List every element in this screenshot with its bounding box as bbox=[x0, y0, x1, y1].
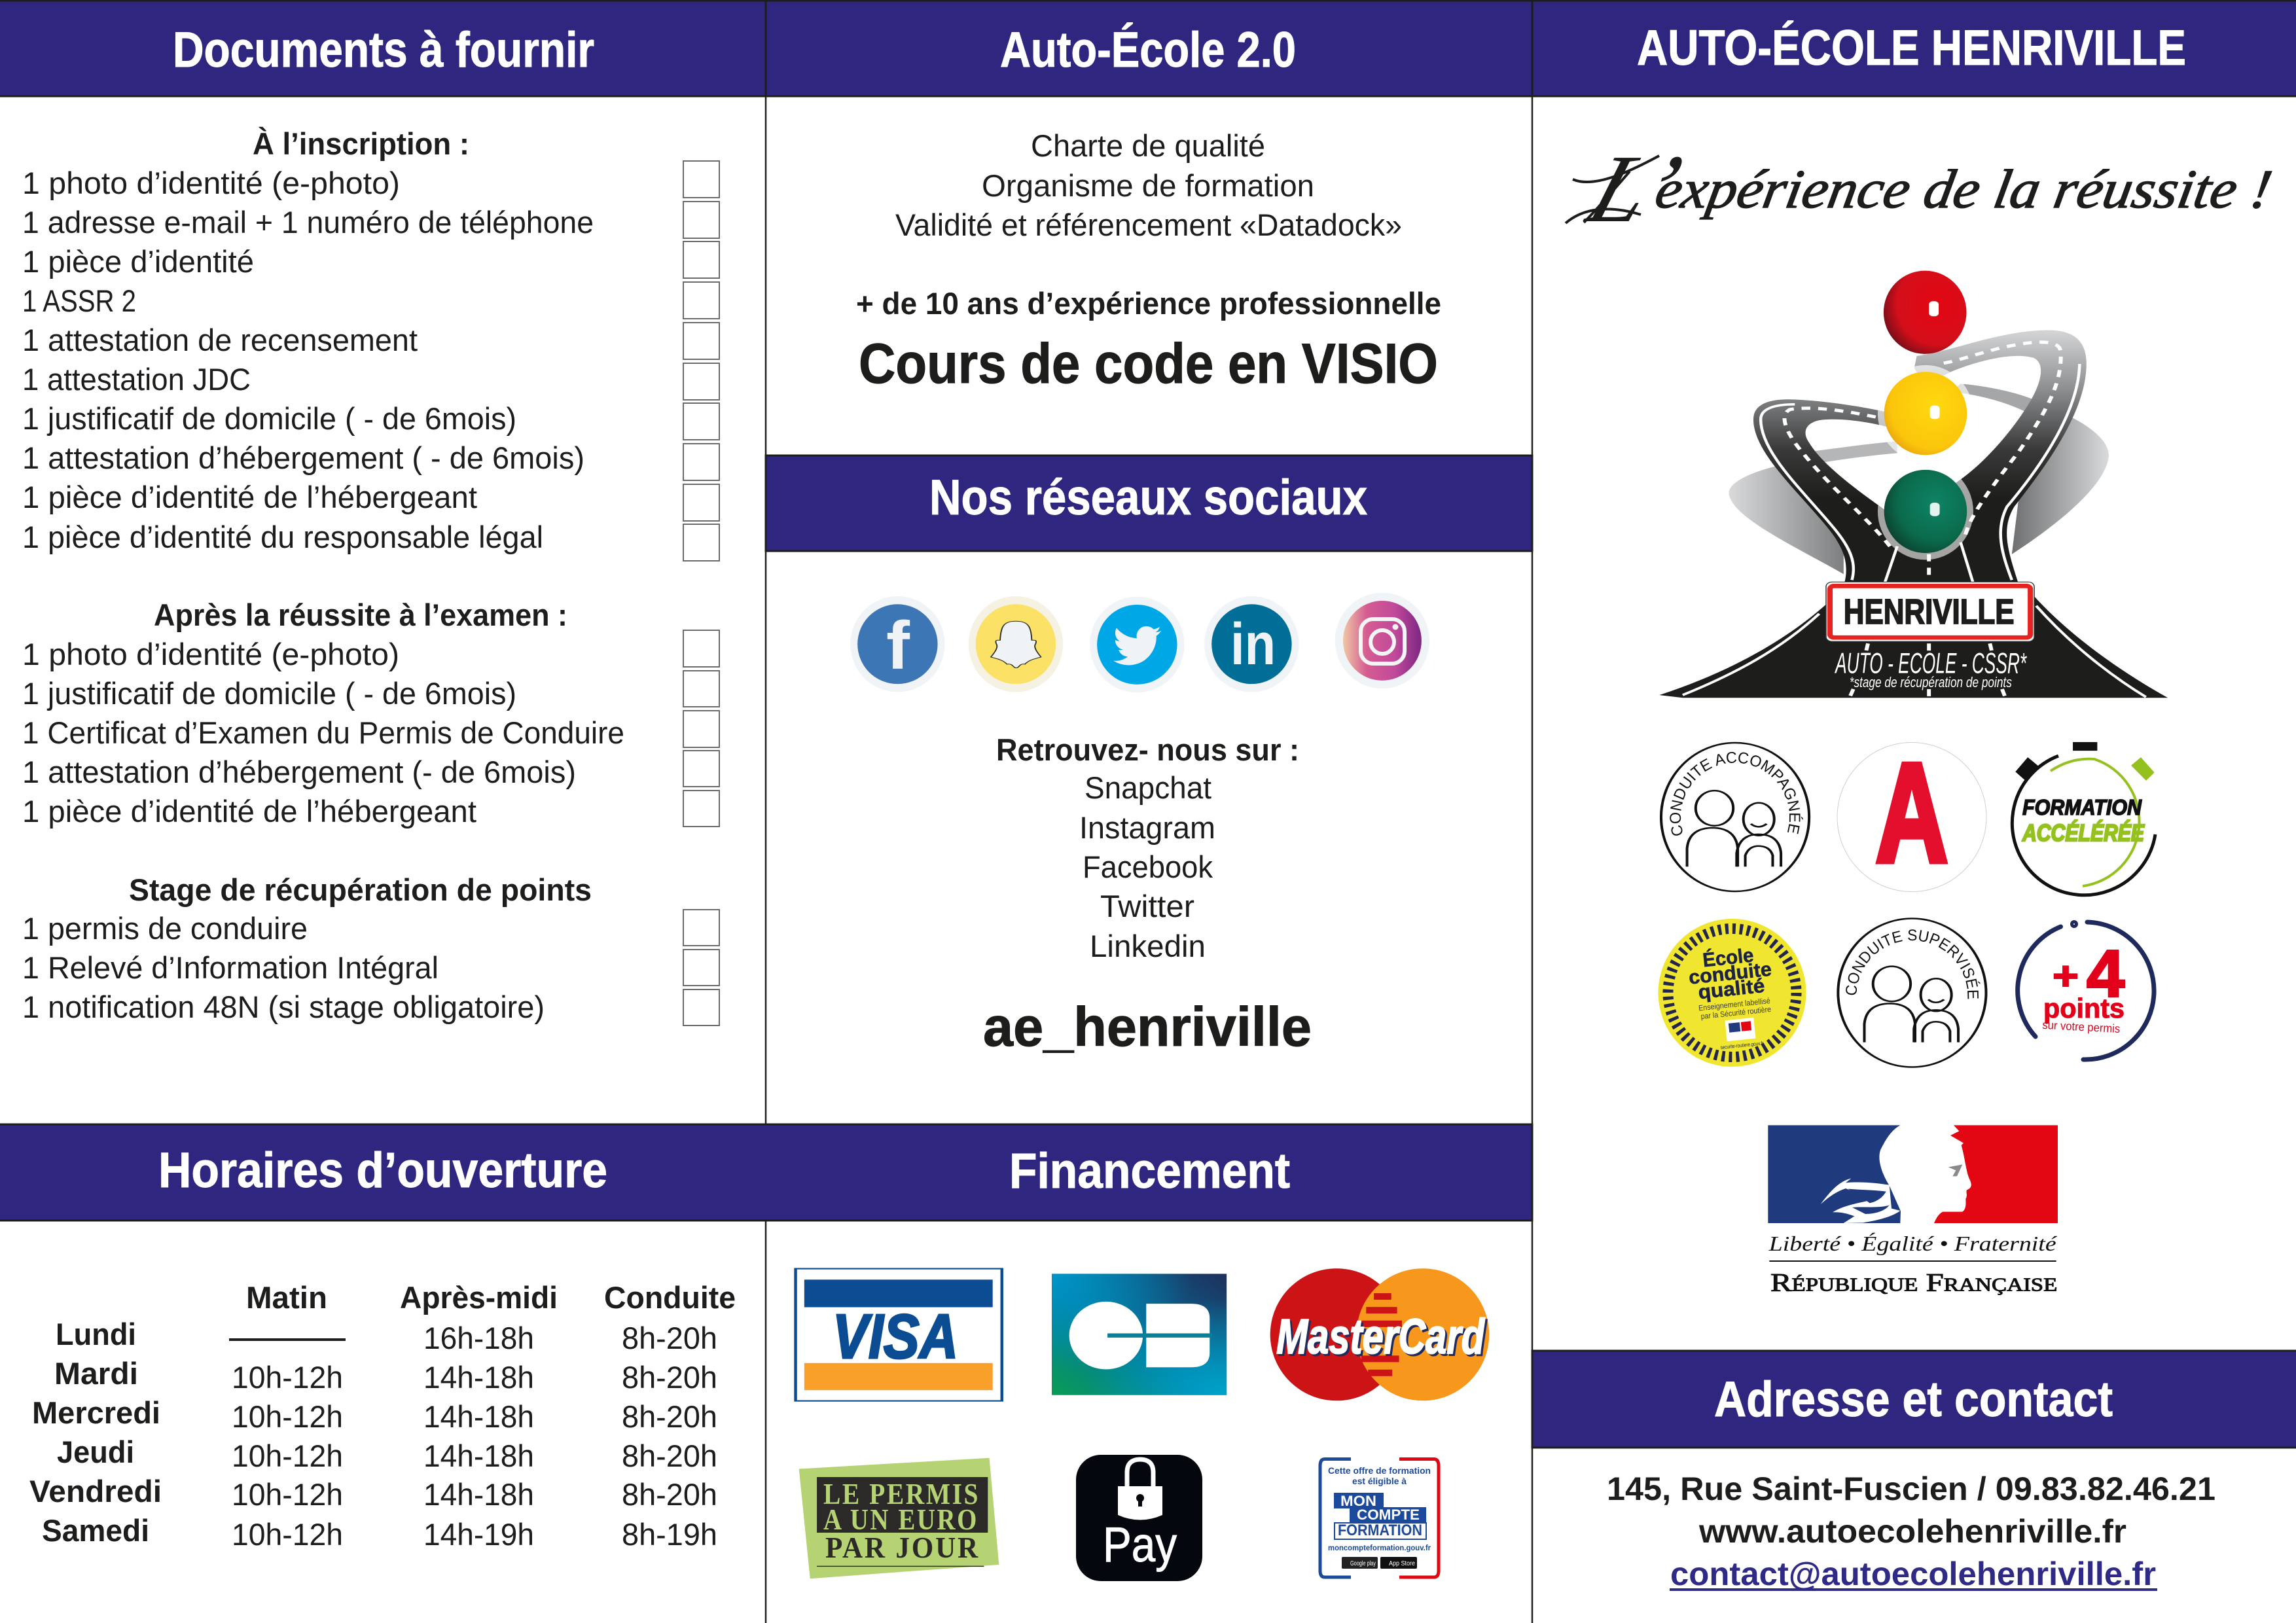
road shadows bbox=[1729, 383, 2109, 574]
table: horaires d'ouverture: 14h-19h bbox=[423, 1517, 534, 1552]
header: Horaires d'ouverture et Financement: Horaires d’ouverture bbox=[158, 1143, 607, 1198]
slogan: L’ bbox=[1576, 135, 1694, 242]
panel: adresse et contact: www.autoecolehenriville.fr bbox=[1698, 1513, 2126, 1550]
panel: documents à l'inscription: 1 photo d’identité (e-photo) bbox=[22, 166, 400, 200]
logo: paiement sécurisé Pay bbox=[1076, 1455, 1202, 1581]
panel: documents après l'examen: 1 justificatif de domicile ( - de 6mois) bbox=[22, 676, 516, 711]
badge: A jeune conducteur bbox=[1837, 734, 1986, 891]
panel: retrouvez-nous: Twitter bbox=[1100, 889, 1194, 923]
table: horaires d'ouverture: 8h-20h bbox=[622, 1360, 717, 1395]
table: horaires d'ouverture: Mardi bbox=[54, 1356, 138, 1391]
badge: A jeune conducteur: A bbox=[1876, 734, 1948, 891]
sign: Henriville: HENRIVILLE bbox=[1844, 592, 2015, 632]
badge: conduite accompagnée: CONDUITE ACCOMPAGNÉE bbox=[1670, 751, 1803, 836]
table: horaires d'ouverture: Conduite bbox=[604, 1280, 736, 1315]
icon: linkedin: in bbox=[1230, 612, 1276, 677]
grid lines bbox=[766, 0, 1532, 1623]
icon: twitter bbox=[1090, 597, 1185, 692]
panel: documents après l'examen: 1 photo d’identité (e-photo) bbox=[22, 637, 399, 671]
panel: documents à l'inscription: 1 ASSR 2 bbox=[22, 283, 136, 318]
icon: instagram bbox=[1335, 593, 1429, 688]
header: Horaires d'ouverture et Financement: Financement bbox=[1009, 1143, 1290, 1199]
panel: documents à l'inscription: 1 adresse e-mail + 1 numéro de téléphone bbox=[22, 205, 594, 240]
table: horaires d'ouverture: 16h-18h bbox=[423, 1321, 534, 1355]
table: horaires d'ouverture: 10h-12h bbox=[232, 1360, 343, 1395]
panel: documents à l'inscription: 1 attestation d’hébergement ( - de 6mois) bbox=[22, 440, 584, 475]
header: Horaires d'ouverture et Financement bbox=[0, 1124, 1532, 1221]
header: Auto-École Henriville: AUTO-ÉCOLE HENRIVILLE bbox=[1637, 20, 2186, 76]
panel: documents après l'examen: 1 Certificat d’Examen du Permis de Conduire bbox=[22, 715, 624, 750]
logo: Mon Compte Formation: Cette offre de formation bbox=[1328, 1465, 1431, 1476]
panel: documents à l'inscription: 1 pièce d’identité du responsable légal bbox=[22, 520, 543, 554]
logo: Visa: VISA bbox=[833, 1302, 958, 1372]
logo: Mon Compte Formation: Google play bbox=[1350, 1560, 1376, 1567]
panel: documents à l'inscription: 1 justificatif de domicile ( - de 6mois) bbox=[22, 401, 516, 436]
table: horaires d'ouverture: Matin bbox=[246, 1280, 327, 1315]
table: horaires d'ouverture: 10h-12h bbox=[232, 1477, 343, 1512]
panel: stage de récupération de points bbox=[22, 872, 719, 1026]
logo: paiement sécurisé Pay: Pay bbox=[1103, 1517, 1177, 1572]
badge: +4 points: sur votre permis bbox=[2042, 1018, 2121, 1035]
logo: le permis à un euro par jour: LE PERMIS bbox=[823, 1477, 980, 1510]
République Française: République Française bbox=[1770, 1268, 2057, 1297]
table: horaires d'ouverture: Lundi bbox=[56, 1317, 136, 1351]
icon: facebook: f bbox=[886, 608, 910, 684]
badge: école conduite qualité: conduite bbox=[1688, 959, 1772, 989]
badge: école conduite qualité: securite-routiere.gouv.fr bbox=[1720, 1040, 1764, 1050]
logo: Visa bbox=[796, 1269, 1002, 1401]
logo: Mon Compte Formation: est éligible à bbox=[1352, 1476, 1407, 1486]
panel: qualité auto-école bbox=[856, 128, 1441, 395]
panel: adresse et contact bbox=[1607, 1471, 2215, 1592]
panel: documents après l'examen bbox=[22, 597, 719, 829]
table: horaires d'ouverture: 14h-18h bbox=[423, 1360, 534, 1395]
logo: le permis à un euro par jour: PAR JOUR bbox=[825, 1531, 980, 1564]
table: horaires d'ouverture: Jeudi bbox=[57, 1435, 134, 1469]
badge: école conduite qualité: qualité bbox=[1697, 975, 1766, 1003]
panel: financement logos bbox=[796, 1268, 1489, 1581]
table: horaires d'ouverture: 8h-20h bbox=[622, 1438, 717, 1473]
badge: école conduite qualité: par la Sécurité routière bbox=[1700, 1005, 1772, 1021]
table: horaires d'ouverture: 8h-20h bbox=[622, 1321, 717, 1355]
logo: Henriville feu tricolore et routes: AUTO - ECOLE - CSSR* bbox=[1835, 647, 2027, 680]
logo: République Française bbox=[1768, 1125, 2058, 1297]
slogan bbox=[1566, 135, 2276, 242]
table: horaires d'ouverture: Mercredi bbox=[32, 1395, 160, 1430]
table: horaires d'ouverture: 10h-12h bbox=[232, 1517, 343, 1552]
text: auto-école CSSR bbox=[1835, 647, 2027, 690]
table: horaires d'ouverture: Samedi bbox=[42, 1513, 149, 1548]
panel: qualité auto-école: + de 10 ans d’expérience professionnelle bbox=[856, 286, 1441, 321]
text: auto-école CSSR: *stage de récupération de points bbox=[1850, 675, 2012, 690]
table: horaires d'ouverture: 10h-12h bbox=[232, 1399, 343, 1434]
panel: retrouvez-nous bbox=[983, 732, 1312, 1058]
table: horaires d'ouverture: 14h-18h bbox=[423, 1438, 534, 1473]
panel: documents à l'inscription: 1 pièce d’identité bbox=[22, 244, 254, 279]
badge: école conduite qualité bbox=[1659, 919, 1806, 1067]
panel: retrouvez-nous: Facebook bbox=[1083, 849, 1213, 884]
panel: retrouvez-nous: Snapchat bbox=[1085, 770, 1211, 805]
panel: documents à l'inscription: 1 attestation de recensement bbox=[22, 323, 418, 357]
panel: qualité auto-école: Cours de code en VISIO bbox=[859, 332, 1438, 395]
motto: Liberté • Égalité • Fraternité bbox=[1768, 1232, 2058, 1255]
logo: MasterCard: MasterCard bbox=[1276, 1309, 1486, 1364]
panel: stage de récupération de points: 1 notification 48N (si stage obligatoire) bbox=[22, 990, 545, 1024]
badge: +4 points: + bbox=[2053, 954, 2079, 998]
panel: documents après l'examen: 1 pièce d’identité de l’hébergeant bbox=[22, 794, 476, 829]
badge: +4 points bbox=[2018, 922, 2154, 1060]
badge: formation accélérée bbox=[2012, 742, 2155, 895]
table: horaires d'ouverture: 8h-20h bbox=[622, 1477, 717, 1512]
table: horaires d'ouverture: 14h-18h bbox=[423, 1399, 534, 1434]
table: horaires d'ouverture: Après-midi bbox=[400, 1280, 558, 1315]
table: horaires d'ouverture: 14h-18h bbox=[423, 1477, 534, 1512]
icon: linkedin bbox=[1204, 596, 1299, 692]
header: Auto-École Henriville bbox=[1532, 1, 2296, 96]
logo: MasterCard: MasterCard bbox=[1278, 1311, 1488, 1366]
header: Adresse et contact: Adresse et contact bbox=[1714, 1372, 2113, 1427]
panel: qualité auto-école: Organisme de formation bbox=[982, 168, 1314, 203]
traffic lights bbox=[1878, 271, 1973, 560]
panel: documents après l'examen: Après la réussite à l’examen : bbox=[154, 597, 567, 632]
panel: adresse et contact: contact@autoecolehenriville.fr bbox=[1670, 1556, 2156, 1592]
panel: documents à l'inscription: 1 pièce d’identité de l’hébergeant bbox=[22, 480, 477, 514]
table: horaires d'ouverture: 8h-19h bbox=[622, 1517, 717, 1552]
icon: snapchat bbox=[969, 596, 1063, 692]
badge: formation accélérée: ACCÉLÉRÉE bbox=[2022, 819, 2145, 846]
panel: adresse et contact: 145, Rue Saint-Fuscien / 09.83.82.46.21 bbox=[1607, 1471, 2215, 1507]
flag with Marianne bbox=[1768, 1125, 2058, 1223]
logo: Mon Compte Formation: moncompteformation.gouv.fr bbox=[1328, 1543, 1431, 1552]
panel: retrouvez-nous: Linkedin bbox=[1090, 929, 1206, 963]
logo: Mon Compte Formation: COMPTE bbox=[1357, 1507, 1420, 1523]
logo: Mon Compte Formation: FORMATION bbox=[1338, 1522, 1422, 1539]
logo: Mon Compte Formation: App Store bbox=[1389, 1560, 1415, 1567]
slogan: expérience de la réussite ! bbox=[1651, 160, 2276, 220]
header: Documents à fournir bbox=[0, 1, 766, 96]
header: Auto-École 2.0 bbox=[766, 1, 1532, 96]
logo: Mon Compte Formation bbox=[1320, 1459, 1439, 1577]
badge: +4 points: points bbox=[2043, 993, 2125, 1024]
panel: qualité auto-école: Validité et référencement «Datadock» bbox=[895, 207, 1402, 242]
header: Documents à fournir: Documents à fournir bbox=[173, 22, 594, 78]
table: horaires d'ouverture: Vendredi bbox=[29, 1474, 162, 1508]
logo: Mon Compte Formation: MON bbox=[1340, 1493, 1376, 1509]
table: horaires d'ouverture: 10h-12h bbox=[232, 1438, 343, 1473]
icon: facebook bbox=[850, 596, 945, 692]
header: Auto-École 2.0: Auto-École 2.0 bbox=[1000, 22, 1296, 78]
panel: qualité auto-école: Charte de qualité bbox=[1031, 128, 1265, 163]
panel: documents à l'inscription: 1 attestation JDC bbox=[22, 362, 251, 397]
table: horaires d'ouverture bbox=[29, 1280, 736, 1552]
badge: formation accélérée: FORMATION bbox=[2022, 795, 2142, 819]
logo: MasterCard bbox=[1270, 1268, 1489, 1400]
panel: stage de récupération de points: 1 permis de conduire bbox=[22, 911, 308, 946]
badge: conduite supervisée: CONDUITE SUPERVISÉE bbox=[1846, 929, 1981, 999]
panel: documents à l'inscription bbox=[22, 126, 719, 561]
badge: conduite supervisée bbox=[1837, 918, 1987, 1068]
logo: le permis à un euro par jour bbox=[799, 1458, 999, 1578]
badge: +4 points: 4 bbox=[2087, 936, 2125, 1011]
sign: Henriville bbox=[1826, 582, 2034, 641]
badge: école conduite qualité: École bbox=[1702, 944, 1755, 971]
panel: retrouvez-nous: Instagram bbox=[1079, 810, 1215, 845]
roads bbox=[1659, 330, 2168, 698]
badge: école conduite qualité: Enseignement labellisé bbox=[1698, 996, 1771, 1012]
panel: stage de récupération de points: Stage de récupération de points bbox=[129, 872, 592, 907]
logo: le permis à un euro par jour: A UN EURO bbox=[823, 1503, 978, 1536]
panel: retrouvez-nous: Retrouvez- nous sur : bbox=[996, 732, 1299, 767]
badges bbox=[1659, 734, 2157, 1068]
panel: retrouvez-nous: ae_henriville bbox=[983, 996, 1312, 1058]
icons: réseaux sociaux bbox=[850, 593, 1429, 692]
table: horaires d'ouverture: 8h-20h bbox=[622, 1399, 717, 1434]
badge: conduite accompagnée bbox=[1660, 742, 1810, 893]
panel: documents à l'inscription: À l’inscription : bbox=[253, 126, 469, 161]
panel: stage de récupération de points: 1 Relevé d’Information Intégral bbox=[22, 950, 439, 985]
logo: CB bbox=[1052, 1274, 1227, 1395]
header: Adresse et contact bbox=[1532, 1351, 2296, 1448]
panel: documents après l'examen: 1 attestation d’hébergement (- de 6mois) bbox=[22, 755, 576, 789]
header: Nos réseaux sociaux bbox=[766, 455, 1532, 551]
header: Nos réseaux sociaux: Nos réseaux sociaux bbox=[929, 470, 1367, 526]
logo: Henriville feu tricolore et routes bbox=[1659, 271, 2168, 698]
